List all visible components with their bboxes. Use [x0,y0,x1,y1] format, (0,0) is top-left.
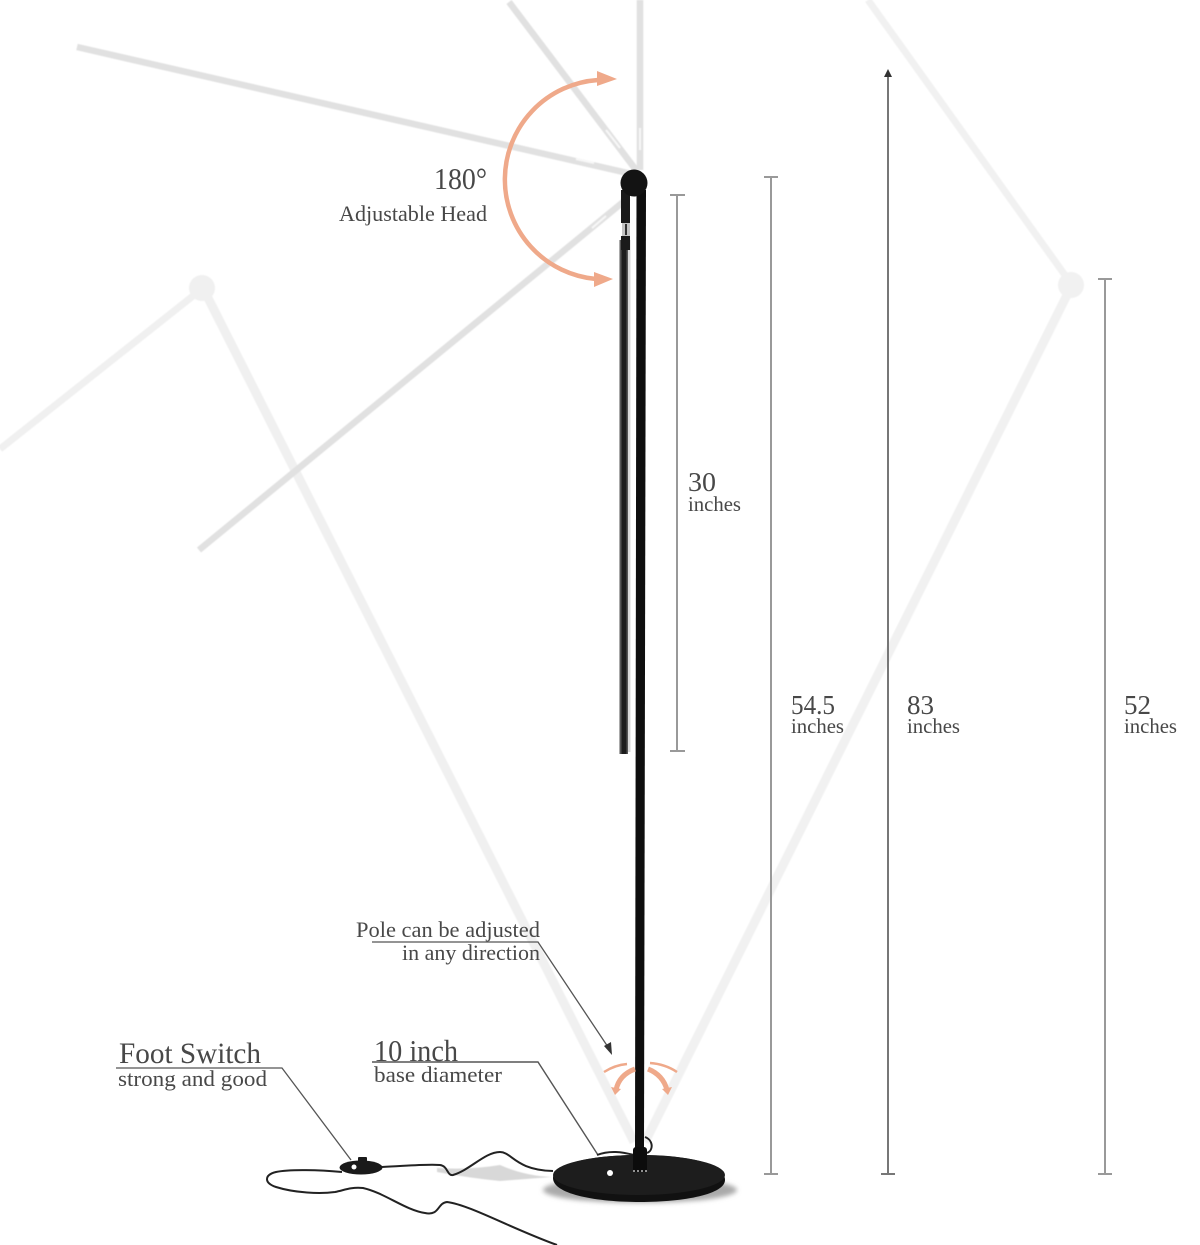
dimension line: 83 inches: inches [907,714,960,738]
dimension line: 52 inches: 52 [1124,690,1151,720]
callout: pole can be adjusted: in any direction [402,940,540,965]
dimension line: 54.5 inches: inches [791,714,844,738]
lamp pole and head [620,170,648,1148]
dimension line: 52 inches: inches [1124,714,1177,738]
label: 180 degree adjustable head: 180° [434,161,487,196]
callout: pole can be adjusted [356,917,612,1055]
cord shadow [437,1165,552,1181]
ghost: lamp tilted left [0,275,634,1142]
callout: 10 inch base diameter: 10 inch [374,1033,458,1068]
dimension line: 83 inches [881,69,960,1174]
callout: 10 inch base diameter: base diameter [374,1062,503,1087]
dimension line: 30 inches [670,195,741,751]
callout: 10 inch base diameter [372,1033,598,1155]
callout: foot switch [116,1037,351,1160]
label: 180 degree adjustable head [339,161,487,226]
orange arrows: pole tilt direction [604,1063,677,1095]
callout: foot switch: Foot Switch [119,1037,261,1070]
arrow: 180 degree head rotation [505,71,617,287]
ghost: lamp tilted right [645,0,1084,1142]
power cord [267,1137,652,1245]
dimension line: 83 inches: 83 [907,690,934,720]
dimension line: 30 inches: 30 [688,467,716,497]
dimension line: 54.5 inches: 54.5 [791,690,835,720]
dimension line: 54.5 inches [764,177,844,1174]
ghost: adjustable head positions [77,0,640,550]
foot switch [340,1157,382,1174]
label: 180 degree adjustable head: Adjustable Head [339,201,487,226]
callout: pole can be adjusted: Pole can be adjusted [356,917,540,942]
lamp base [543,1147,737,1203]
callout: foot switch: strong and good [118,1066,267,1091]
dimension line: 52 inches [1098,279,1177,1174]
dimension line: 30 inches: inches [688,492,741,516]
